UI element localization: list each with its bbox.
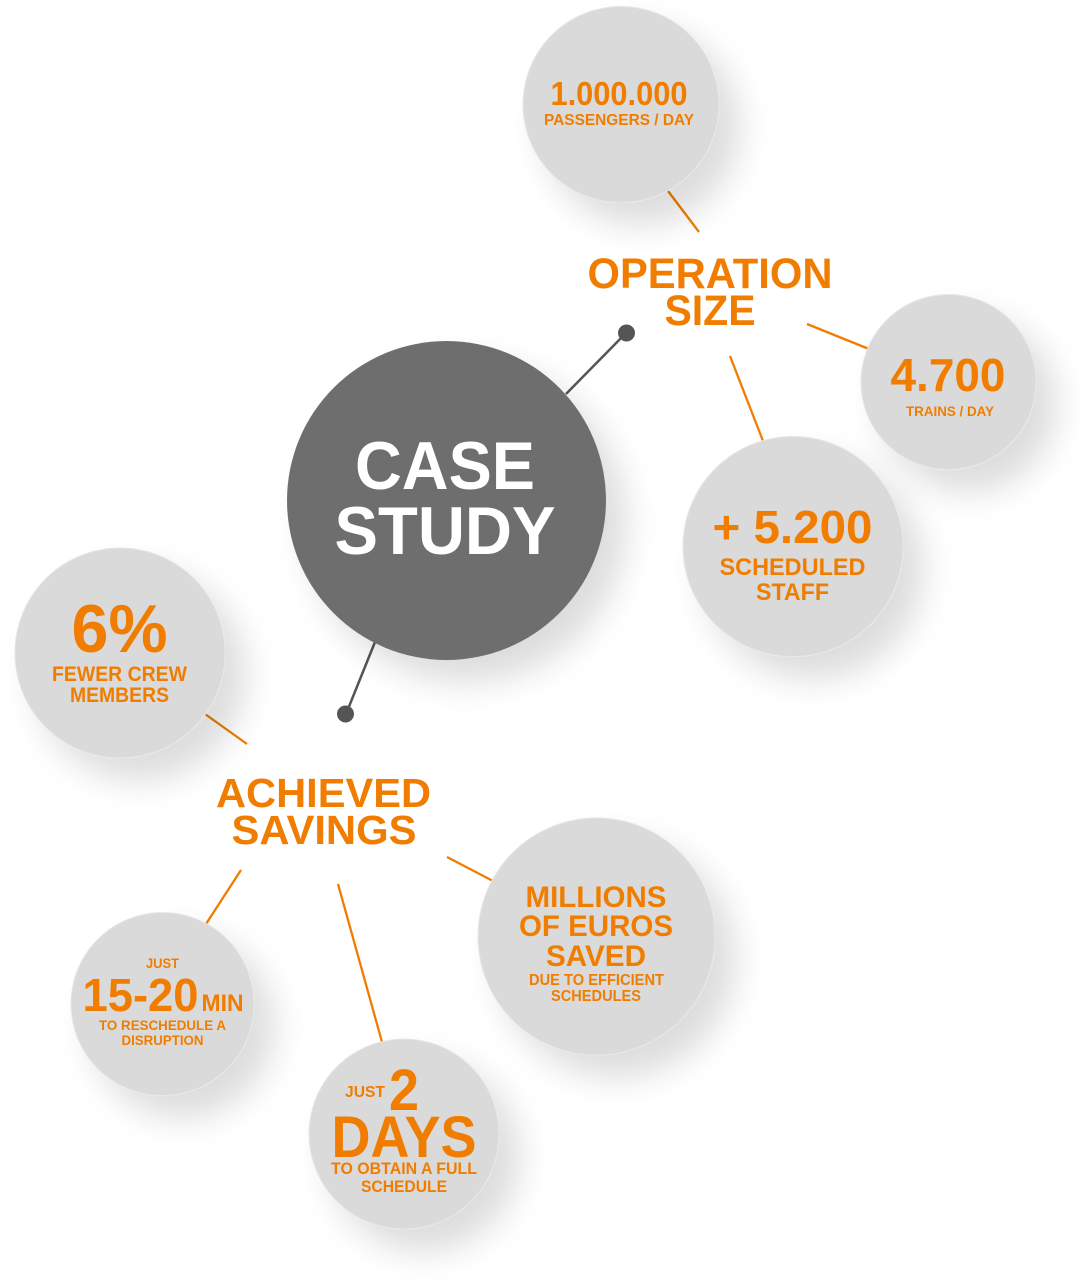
panel: trains per day: TRAINS / DAY [906, 403, 995, 419]
panel: fewer crew members: MEMBERS [70, 684, 169, 707]
connector lines: operation size [668, 191, 869, 441]
panel: minutes to reschedule [71, 912, 254, 1096]
panel: fewer crew members: FEWER CREW [52, 663, 187, 686]
panel: millions of euros saved: DUE TO EFFICIENT [529, 972, 664, 989]
panel: case study circle: CASE [355, 428, 535, 504]
panel: case study circle: STUDY [334, 493, 556, 569]
panel: minutes to reschedule: 15-20 [82, 969, 198, 1021]
connector: case study to achieved savings [337, 642, 375, 722]
panel: scheduled staff: + 5.200 [712, 501, 872, 553]
panel: scheduled staff [683, 436, 903, 656]
heading: operation size: OPERATION [588, 250, 832, 298]
panel: days to obtain schedule: DAYS [332, 1105, 476, 1170]
panel: fewer crew members: 6% [72, 591, 168, 667]
panel: minutes to reschedule: DISRUPTION [122, 1032, 204, 1048]
panel: passengers per day: 1.000.000 [550, 75, 688, 112]
panel: days to obtain schedule: JUST [345, 1084, 385, 1101]
panel: trains per day [861, 294, 1036, 470]
panel: minutes to reschedule: JUST [146, 955, 179, 971]
panel: days to obtain schedule: SCHEDULE [361, 1177, 447, 1196]
panel: millions of euros saved: SAVED [546, 940, 646, 973]
panel: millions of euros saved [478, 818, 715, 1055]
panel: millions of euros saved: OF EUROS [519, 910, 673, 943]
heading: operation size: SIZE [664, 287, 756, 335]
connector lines: achieved savings [205, 714, 493, 1042]
panel: days to obtain schedule: 2 [389, 1058, 419, 1123]
panel: scheduled staff: STAFF [756, 579, 829, 606]
panel: minutes to reschedule: MIN [202, 990, 244, 1017]
panel: days to obtain schedule: TO OBTAIN A FULL [331, 1159, 477, 1178]
panel: millions of euros saved: MILLIONS [526, 881, 666, 914]
panel: passengers per day: PASSENGERS / DAY [544, 112, 694, 129]
panel: trains per day: 4.700 [890, 349, 1006, 401]
panel: millions of euros saved: SCHEDULES [551, 988, 641, 1005]
connector: case study to operation size [566, 324, 635, 394]
panel: minutes to reschedule: TO RESCHEDULE A [99, 1017, 226, 1033]
heading: achieved savings: SAVINGS [232, 807, 416, 853]
panel: passengers per day [523, 6, 719, 202]
panel: fewer crew members [15, 548, 225, 758]
panel: days to obtain schedule [309, 1039, 499, 1229]
heading: operation size [588, 250, 832, 335]
panel: scheduled staff: SCHEDULED [720, 554, 866, 581]
panel: case study circle [287, 341, 606, 660]
heading: achieved savings: ACHIEVED [216, 770, 431, 816]
heading: achieved savings [216, 770, 431, 853]
